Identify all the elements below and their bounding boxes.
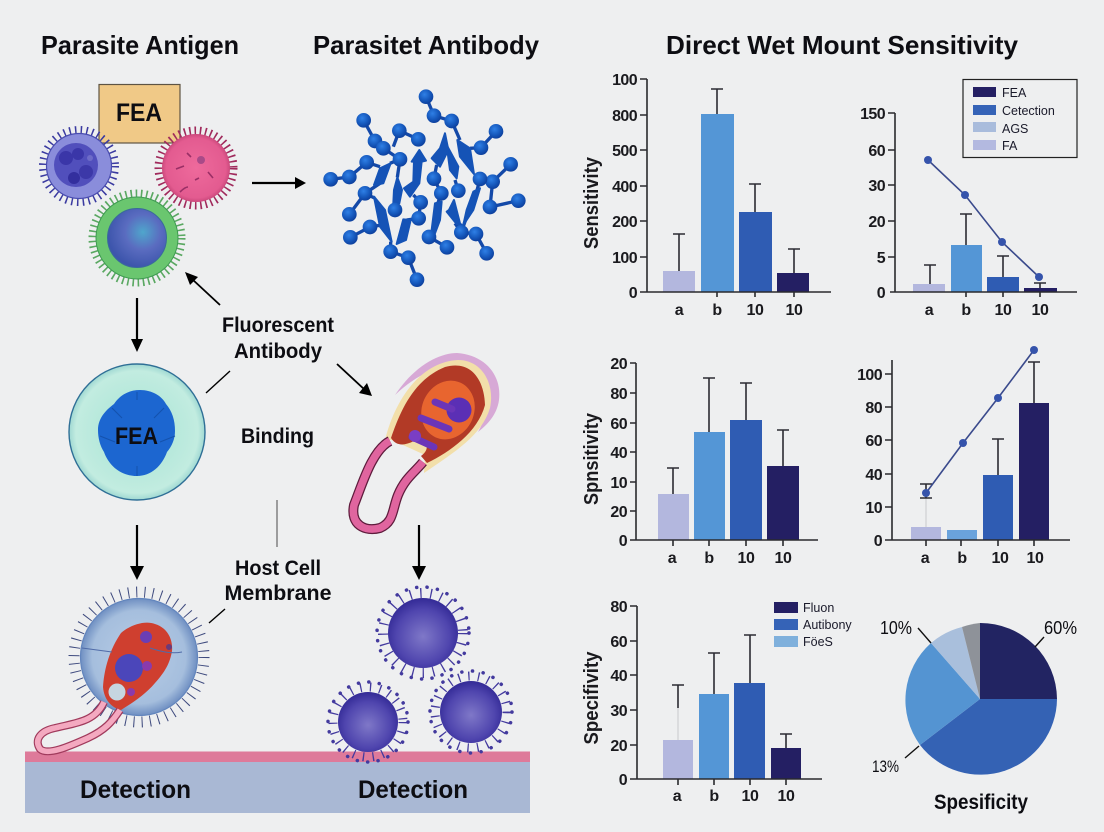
combo chart 2: bars with line: 150: [860, 106, 886, 123]
bar chart 1: sensitivity: 100: [612, 72, 638, 89]
divider tick: [276, 500, 278, 547]
bar chart 5: specificity: 80: [610, 599, 628, 616]
icon: purple virus top: [377, 587, 469, 679]
bar chart 3: sensitivity: 40: [610, 445, 628, 462]
combo chart 4: bars with rising line: 10: [992, 550, 1009, 567]
legend: chart 2: FA: [1002, 139, 1018, 153]
bar chart 5: specificity: [581, 599, 822, 805]
bar chart 1: sensitivity: 500: [612, 143, 638, 160]
legend: chart 2: FEA: [1002, 86, 1027, 100]
arrow: down from green cell: [131, 298, 143, 352]
legend: chart 5: FöeS: [803, 635, 833, 649]
bar chart 3: sensitivity: [581, 356, 818, 567]
bar chart 1: sensitivity: 200: [612, 214, 638, 231]
bar chart 1: sensitivity: 10: [746, 302, 764, 319]
leader line: membrane to host cell: [209, 609, 225, 623]
combo chart 2: bars with line: 5: [877, 250, 886, 267]
bar chart 1: sensitivity: 10: [786, 302, 803, 319]
FEA label box: FEA: [116, 99, 162, 127]
legend: chart 2: [963, 80, 1077, 158]
arrow: antigen to antibody: [252, 177, 306, 189]
bar chart 3: sensitivity: 10: [738, 550, 755, 567]
bar chart 5: specificity: 40: [610, 668, 628, 685]
combo chart 4: bars with rising line: 60: [865, 433, 883, 450]
icon: blue antibody molecule network: [323, 89, 526, 287]
legend: chart 2: Cetection: [1002, 104, 1055, 118]
icon: pink spiked antigen cell: [158, 130, 234, 206]
pie title: Spesificity: Spesificity: [934, 791, 1028, 814]
icon: purple virus bottom right: [430, 671, 512, 753]
arrow: down to purple viruses: [412, 525, 426, 580]
label: Detection left: Detection: [80, 776, 191, 804]
bar chart 3: sensitivity: b: [704, 550, 714, 567]
y axis title: Spnsitivity: [581, 412, 603, 505]
combo chart 4: bars with rising line: 10: [1026, 550, 1044, 567]
legend: chart 5: Autibony: [803, 618, 852, 632]
icon: blue spiked antigen cell: [43, 130, 115, 202]
icon: FEA round cell: [69, 364, 205, 500]
combo chart 2: bars with line: 60: [868, 143, 886, 160]
arrow: down to host cell: [130, 525, 144, 580]
combo chart 4: bars with rising line: 10: [865, 500, 883, 517]
title: Direct Wet Mount Sensitivity: Direct Wet Mount Sensitivity: [666, 30, 1019, 60]
leader line: antibody to round cell: [206, 371, 230, 393]
combo chart 2: bars with line: 20: [868, 214, 886, 231]
pie chart: [905, 623, 1057, 775]
bar chart 1: sensitivity: a: [675, 302, 684, 319]
label: Fluorescent Antibody: Fluorescent: [222, 314, 334, 337]
detection band: [25, 752, 530, 813]
combo chart 2: bars with line: 0: [877, 285, 886, 302]
pie label 60%: 60%: [1044, 618, 1077, 638]
label: Host Cell Membrane: Host Cell: [235, 557, 321, 580]
title: Parasitet Antibody: Parasitet Antibody: [313, 30, 540, 60]
icon: green spiked antigen cell: [92, 194, 182, 282]
combo chart 4: bars with rising line: 0: [874, 533, 883, 550]
label: Binding: Binding: [241, 425, 314, 448]
icon: FEA round cell: FEA: [115, 423, 158, 450]
combo chart 2: bars with line: 30: [868, 178, 886, 195]
bar chart 1: sensitivity: [581, 72, 831, 319]
arrow: antibody to parasite: [337, 364, 372, 396]
bar chart 5: specificity: 10: [778, 788, 795, 805]
bar chart 5: specificity: b: [709, 788, 719, 805]
bar chart 3: sensitivity: 60: [610, 416, 628, 433]
combo chart 4: bars with rising line: 80: [865, 400, 883, 417]
bar chart 5: specificity: 30: [610, 703, 628, 720]
combo chart 2: bars with line: b: [961, 302, 971, 319]
bar chart 3: sensitivity: 10: [774, 550, 792, 567]
combo chart 4: bars with rising line: [857, 346, 1070, 567]
pie label 13%: 13%: [872, 757, 899, 776]
bar chart 5: specificity: 10: [742, 788, 759, 805]
y axis title: Sensitivity: [581, 156, 603, 249]
bar chart 3: sensitivity: 20: [610, 504, 628, 521]
bar chart 1: sensitivity: b: [712, 302, 722, 319]
bar chart 3: sensitivity: a: [668, 550, 677, 567]
icon: infected host cell with parasite: [38, 592, 204, 751]
label: Host Cell Membrane: Membrane: [224, 582, 332, 605]
icon: red parasite with pink tail: [353, 353, 499, 529]
combo chart 2: bars with line: 10: [994, 302, 1012, 319]
combo chart 4: bars with rising line: b: [957, 550, 967, 567]
label: Detection right: Detection: [358, 776, 468, 804]
bar chart 3: sensitivity: 0: [619, 533, 628, 550]
bar chart 1: sensitivity: 0: [629, 285, 638, 302]
bar chart 3: sensitivity: 80: [610, 386, 628, 403]
label: Host Cell Membrane: [224, 557, 332, 605]
combo chart 4: bars with rising line: 100: [857, 367, 883, 384]
title: Parasite Antigen: Parasite Antigen: [41, 30, 239, 60]
combo chart 2: bars with line: 10: [1032, 302, 1049, 319]
icon: purple virus bottom left: [328, 682, 408, 762]
bar chart 5: specificity: 20: [610, 738, 628, 755]
label: Fluorescent Antibody: Antibody: [234, 340, 322, 363]
bar chart 5: specificity: a: [673, 788, 682, 805]
bar chart 1: sensitivity: 400: [612, 179, 638, 196]
bar chart 3: sensitivity: 20: [610, 356, 628, 373]
FEA label box: [99, 84, 180, 143]
legend: chart 5: [774, 601, 852, 649]
bar chart 1: sensitivity: 800: [612, 108, 638, 125]
combo chart 4: bars with rising line: a: [921, 550, 930, 567]
combo chart 2: bars with line: [860, 106, 1077, 319]
bar chart 1: sensitivity: 100: [612, 250, 638, 267]
bar chart 5: specificity: 60: [610, 634, 628, 651]
y axis title: Specifivity: [581, 651, 603, 744]
legend: chart 5: Fluon: [803, 601, 834, 615]
bar chart 5: specificity: 0: [619, 772, 628, 789]
combo chart 2: bars with line: a: [925, 302, 934, 319]
label: Fluorescent Antibody: [222, 314, 334, 363]
pie label 10%: 10%: [880, 618, 912, 638]
arrow: fluorescent antibody to green cell: [185, 272, 220, 305]
combo chart 4: bars with rising line: 40: [865, 467, 883, 484]
legend: chart 2: AGS: [1002, 122, 1028, 136]
bar chart 3: sensitivity: 10: [610, 475, 628, 492]
